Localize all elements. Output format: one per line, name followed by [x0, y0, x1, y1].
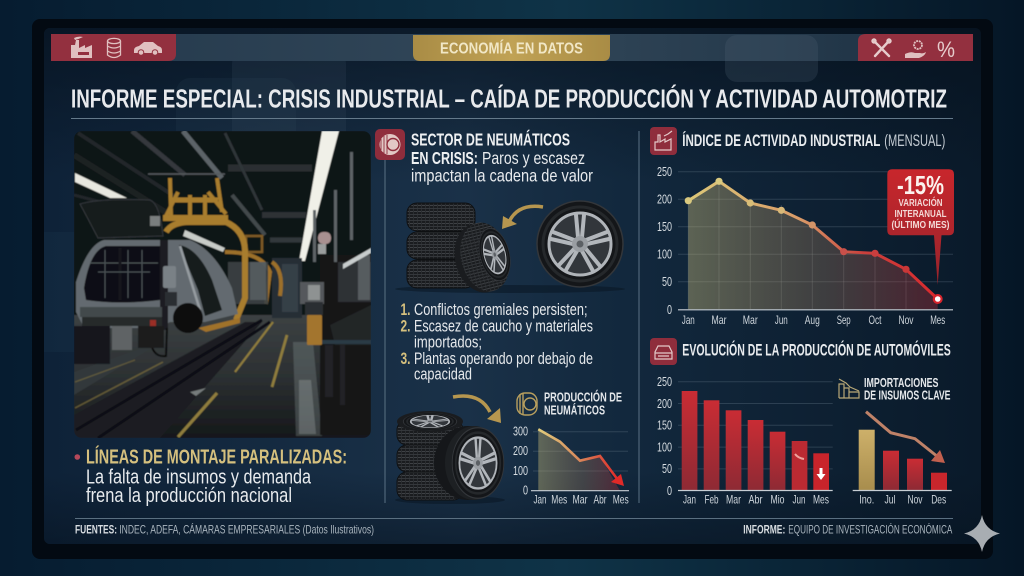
line chart: 200 [657, 192, 672, 206]
line chart: Mes [930, 313, 945, 327]
chart: importaciones de insumos clave: Des [931, 492, 946, 506]
list: causes: capacidad [414, 364, 472, 383]
panel: índice de actividad industrial [650, 127, 954, 327]
bar chart: automóviles: Feb [704, 492, 719, 506]
icon: car [134, 42, 162, 55]
footer: fuentes: INDEC, ADEFA, CÁMARAS EMPRESARIALES (Datos Ilustrativos) [119, 521, 374, 536]
list: causes: 2. [400, 316, 410, 335]
footer: informe: EQUIPO DE INVESTIGACIÓN ECONÓMICA [788, 521, 952, 536]
panel: right icon tab [858, 34, 973, 62]
bar chart: automóviles: 100 [657, 440, 672, 454]
chart: producción de neumáticos: Jan [534, 492, 546, 506]
footer: fuentes [75, 521, 374, 536]
icon: factory badge [650, 127, 677, 155]
bar chart: automóviles: 150 [657, 418, 672, 432]
floor tones [74, 322, 262, 438]
line chart: Sep [837, 313, 851, 327]
heading: IMPORTACIONES [864, 376, 938, 390]
line chart [657, 165, 953, 327]
heading: sector de neumáticos: impactan la cadena de valor [411, 166, 593, 186]
illustration: second tire stack [395, 411, 505, 504]
caption: líneas de montaje: La falta de insumos y demanda [86, 466, 312, 488]
list: causes: 1. [400, 300, 410, 319]
list: causes: importados; [414, 332, 482, 351]
list: causes: Plantas operando por debajo de [414, 349, 593, 368]
bar chart: automóviles: 0 [667, 484, 672, 498]
chart: importaciones de insumos clave: Ino. [859, 492, 874, 506]
list: causes: 3. [400, 349, 410, 368]
arrow: curved gold [502, 206, 543, 229]
chart: producción de neumáticos: Mar [572, 492, 588, 506]
badge: economía en datos [413, 35, 610, 61]
distant hall [272, 258, 302, 318]
car body shell [74, 200, 238, 364]
panel: left icon tab [51, 34, 176, 61]
chart: importaciones de insumos clave [839, 376, 952, 506]
line chart: 100 [657, 248, 672, 262]
footer: fuentes: FUENTES: [75, 522, 117, 536]
bar chart: automóviles: 200 [657, 397, 672, 411]
heading [544, 390, 622, 417]
bar chart: automóviles: Mes [813, 492, 829, 506]
chart: producción de neumáticos: 300 [513, 424, 528, 438]
heading: ÍNDICE DE ACTIVIDAD INDUSTRIAL [682, 131, 880, 150]
bar chart: automóviles: Abr [748, 492, 762, 506]
icon: database cylinder [108, 38, 120, 58]
right-side machinery [300, 152, 371, 435]
heading: sector de neumáticos: SECTOR DE NEUMÁTICOS [411, 128, 570, 150]
chart: producción de neumáticos: 0 [523, 484, 528, 498]
icon: sparkle star [964, 515, 1000, 552]
line chart: 250 [657, 165, 672, 179]
icon: declining chart [839, 379, 859, 398]
heading: PRODUCCIÓN DE [544, 390, 622, 405]
list: causes: Escasez de caucho y materiales [414, 316, 593, 335]
list: causes: Conflictos gremiales persisten; [414, 300, 588, 319]
chart: producción de neumáticos: Abr [594, 492, 606, 506]
panel: evolución de la producción [650, 338, 952, 506]
heading: DE INSUMOS CLAVE [864, 388, 950, 402]
heading: (MENSUAL) [884, 132, 945, 150]
chart: importaciones de insumos clave: Jul [884, 492, 896, 506]
line chart: Jun [775, 313, 788, 327]
heading [864, 376, 950, 402]
line chart: Jan [682, 313, 695, 327]
bar chart: automóviles: Mar [726, 492, 741, 506]
bar chart: automóviles: Jun [792, 492, 806, 506]
far gantries [225, 252, 281, 304]
line chart: Mar [743, 313, 758, 327]
chart: producción de neumáticos: 100 [513, 464, 528, 478]
line chart: Aug [805, 313, 820, 327]
callout: -15%: (ÚLTIMO MES) [892, 218, 950, 231]
icon: tire outline [517, 393, 537, 415]
chart: producción de neumáticos: Mes [551, 492, 567, 506]
footer [75, 518, 953, 536]
line chart: 0 [667, 303, 672, 317]
line chart: Nov [898, 313, 914, 327]
footer: informe: INFORME: [743, 522, 785, 536]
chart: producción de neumáticos [513, 390, 629, 506]
icon: factory [71, 37, 92, 58]
icon: hand with gear [905, 41, 926, 58]
heading: sector de neumáticos [411, 128, 593, 186]
floor stripes [75, 322, 287, 437]
list: causes [400, 300, 593, 383]
callout: -15%: VARIACIÓN [898, 196, 942, 209]
footer: informe [743, 521, 952, 536]
caption: líneas de montaje [74, 446, 347, 507]
icon: car badge [650, 338, 677, 365]
icon: percent: % [937, 37, 955, 62]
ceiling beams [74, 131, 312, 240]
chart: importaciones de insumos clave: Nov [908, 492, 922, 506]
ceiling lights [299, 131, 339, 261]
arrow: curved gold down [453, 396, 501, 423]
bar chart: automóviles: 250 [657, 375, 672, 389]
bar chart: automóviles [657, 375, 833, 506]
heading: NEUMÁTICOS [544, 402, 605, 417]
callout: -15%: -15% [897, 170, 944, 200]
line chart: Mar [712, 313, 726, 327]
line chart: 50 [662, 275, 672, 289]
bar chart: automóviles: Mio [770, 492, 785, 506]
caption: líneas de montaje: LÍNEAS DE MONTAJE PARALIZADAS: [86, 446, 347, 468]
header strip [51, 34, 973, 82]
heading: sector de neumáticos: Paros y escasez [482, 148, 585, 168]
panel: tire sector [375, 128, 629, 506]
bar chart: automóviles: Jan [683, 492, 696, 506]
icon: tools [872, 40, 890, 56]
callout: -15% [887, 169, 954, 285]
line chart: Oct [868, 313, 882, 327]
line chart: 150 [657, 220, 672, 234]
caption: líneas de montaje: frena la producción nacional [86, 485, 292, 507]
badge: economía en datos: ECONOMÍA EN DATOS [440, 40, 583, 58]
yellow gantry [163, 178, 245, 320]
icon: down arrow [816, 468, 826, 480]
icon: tire badge [375, 129, 405, 160]
chart: producción de neumáticos: Mes [613, 492, 629, 506]
panel: factory photo [74, 131, 371, 438]
illustration: tire stack and wheel [395, 201, 625, 298]
heading: sector de neumáticos: EN CRISIS: [411, 148, 478, 168]
bar chart: automóviles: 50 [662, 462, 672, 476]
arrow: trend down [866, 412, 945, 463]
callout: -15%: INTERANUAL [894, 209, 946, 220]
chart: producción de neumáticos: 200 [513, 444, 528, 458]
